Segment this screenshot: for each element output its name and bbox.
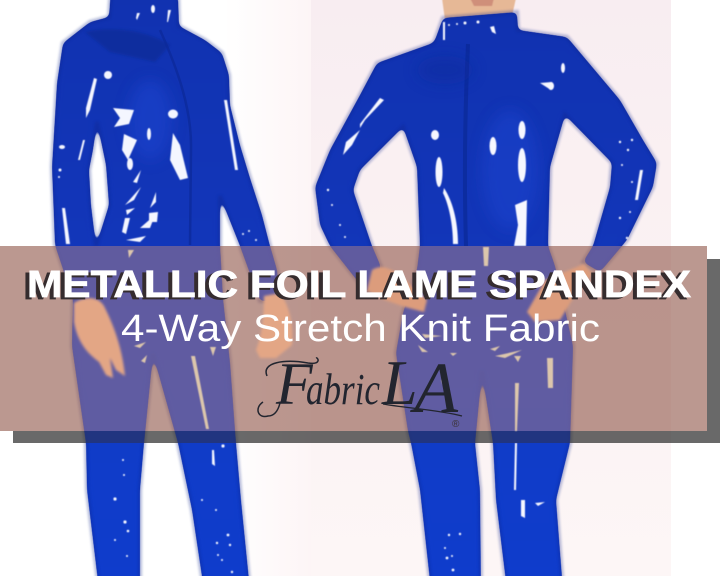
blue tint of suits through shadow [84,431,570,443]
model skin: necks and faces [140,0,516,20]
subtitle: 4-Way Stretch Knit Fabric [121,308,600,350]
hands and highlights seen through banner [74,247,592,431]
logo: FabricLA script wordmark: abric [306,365,380,414]
title: drop shadow and white lettering: METALLIC FOIL LAME SPANDEX [23,266,688,308]
left model gloss highlights [58,5,257,573]
translucent brown banner [0,246,707,431]
logo: FabricLA script wordmark: L [381,347,418,418]
right model hands [367,264,592,322]
suit shading and zip seams [85,29,538,246]
logo: FabricLA script wordmark: ® [452,419,460,430]
right model gloss highlights [327,20,643,571]
left model hands [74,293,292,378]
logo: FabricLA script wordmark: A [410,348,459,428]
suits seen through banner [56,246,622,431]
banner drop shadow [13,259,720,443]
logo: FabricLA script wordmark [258,347,462,430]
title: drop shadow and white lettering: METALLIC FOIL LAME SPANDEX [27,264,692,306]
logo: FabricLA script wordmark: F [275,351,314,417]
through-banner gloss marks [128,247,553,431]
